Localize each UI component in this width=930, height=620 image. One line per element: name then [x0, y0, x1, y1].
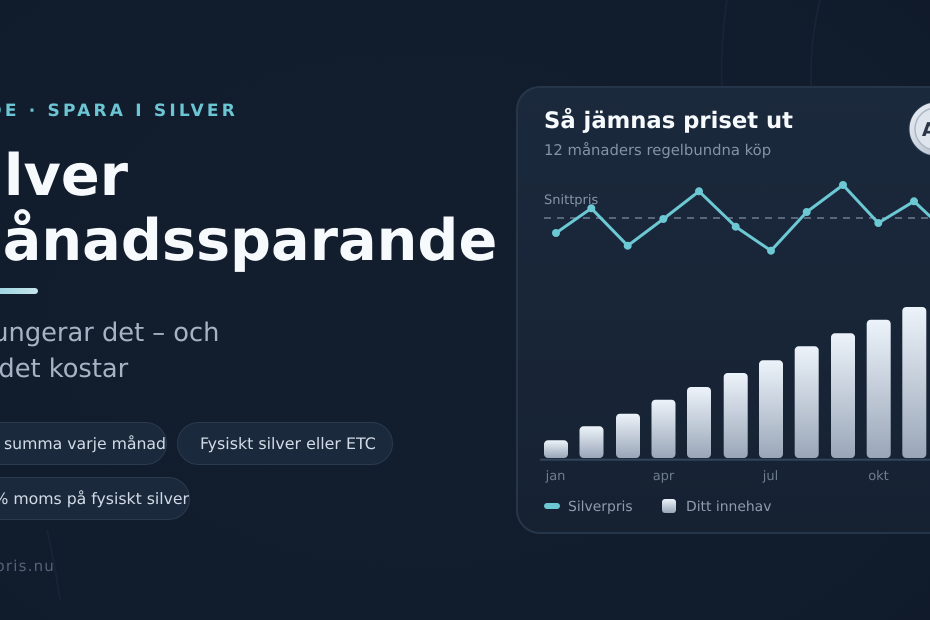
card heading: Så jämnas priset ut	[544, 108, 793, 134]
month axis labels: jul	[762, 469, 778, 484]
month axis labels: apr	[653, 469, 675, 484]
line chart: silver price: Snittpris	[544, 193, 599, 208]
month axis labels: jan	[545, 469, 565, 484]
card subheading: 12 månaders regelbundna köp	[544, 142, 771, 159]
subtitle	[0, 318, 219, 384]
panel: chart card	[516, 86, 930, 534]
accent rule	[0, 288, 38, 294]
legend: Ditt innehav	[686, 499, 771, 515]
chip: moms	[0, 477, 190, 520]
title	[0, 142, 497, 274]
legend: Silverpris	[568, 499, 633, 515]
chip: fysiskt silver	[177, 422, 393, 465]
chip text: fysiskt silver: Fysiskt silver eller ETC	[200, 434, 376, 453]
month axis labels: okt	[868, 469, 889, 484]
chip: fast summa	[0, 422, 167, 465]
